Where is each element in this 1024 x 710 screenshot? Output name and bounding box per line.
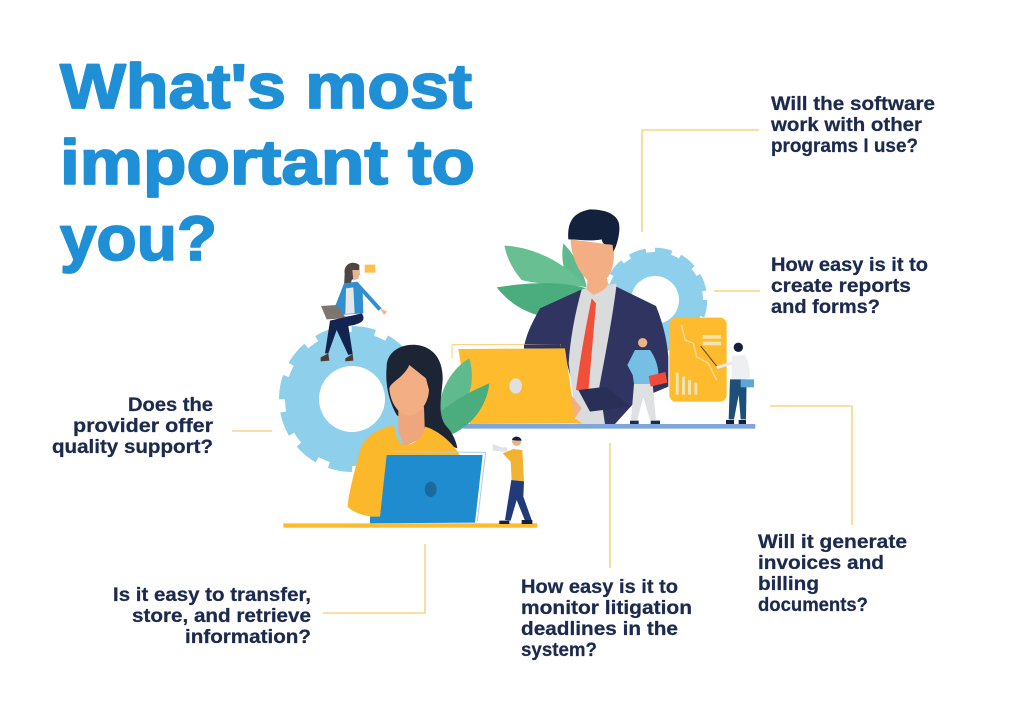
illustration: woman with laptop [283,263,537,528]
text: reports question [771,254,928,318]
title [60,52,475,274]
arm [578,387,630,412]
desk [463,424,755,429]
text: reports question: How easy is it to [771,254,928,276]
chart board [669,318,727,402]
woman sitting on gear [321,263,387,361]
neck and face [571,239,614,295]
text: invoices question: documents? [758,594,868,616]
text: support question: quality support? [52,436,213,458]
connector: transfer [323,544,425,613]
text: litigation question: deadlines in the [521,618,678,640]
hair [568,209,619,252]
title: important to [60,128,475,198]
man with megaphone [493,437,532,524]
shirt [569,283,617,424]
connector: software [642,130,759,232]
neck [398,407,425,447]
text: invoices question: invoices and [758,552,884,574]
text: litigation question: system? [521,639,597,661]
text: invoices question: Will it generate [758,531,907,553]
icon: green leaves behind woman [438,358,489,434]
presenter with pointer [701,343,754,424]
illustration: businessman with laptop [452,209,755,429]
text: support question [52,394,213,458]
text: transfer question: information? [185,626,311,648]
text: transfer question [113,584,311,648]
person in blue with red folder [627,338,667,424]
blue laptop [370,452,486,523]
connector: litigation [609,443,611,568]
title: you? [60,204,217,274]
connector: support [232,430,272,432]
text: reports question: and forms? [771,296,880,318]
icon: green leaves behind man [497,243,587,315]
icon: right gear [606,251,704,349]
icon: left gear [283,330,421,468]
suit [524,286,668,424]
text: invoices question [758,531,907,616]
text: litigation question [521,576,692,661]
connector: invoices [770,406,852,525]
hair [386,345,457,448]
text: software question [770,93,935,157]
text: software question: programs I use? [771,135,918,157]
text: software question: Will the software [771,93,935,115]
text: litigation question: monitor litigation [521,597,692,619]
text: transfer question: store, and retrieve [132,605,311,627]
face [389,365,429,416]
text: support question: Does the [128,394,213,416]
connector: reports [714,290,760,292]
text: transfer question: Is it easy to transfer, [113,584,311,606]
text: software question: work with other [770,114,922,136]
title: What's most [60,52,472,122]
tie [576,298,596,392]
text: litigation question: How easy is it to [521,576,678,598]
yellow top [348,425,470,518]
desk [283,523,537,528]
text: support question: provider offer [73,415,213,437]
text: reports question: create reports [771,275,911,297]
text: invoices question: billing [758,573,819,595]
laptop [452,344,582,424]
